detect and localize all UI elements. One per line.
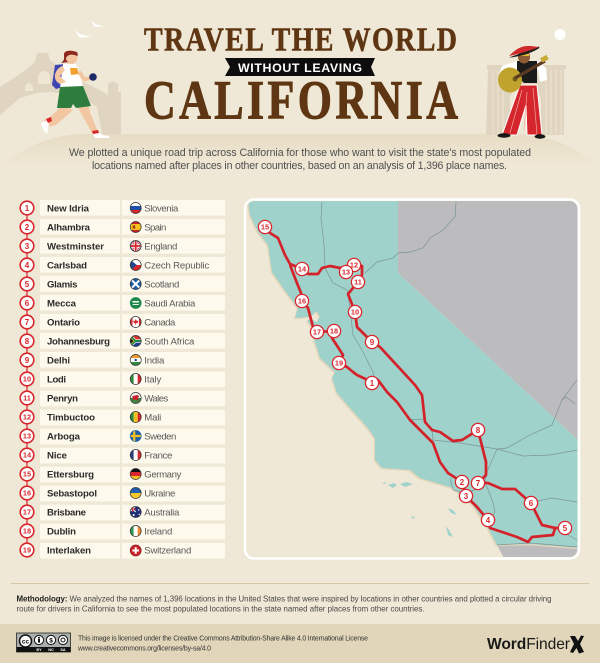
row 9 Delhi — [20, 352, 225, 368]
row 10 Lodi — [20, 372, 225, 387]
row 13 Arboga: 13 — [23, 432, 31, 441]
row 16 Sebastopol: Ukraine — [144, 488, 175, 499]
row 6 Mecca: Mecca — [47, 298, 77, 309]
title line 3: CALIFORNIA — [144, 70, 458, 131]
row 2 Alhambra — [20, 219, 225, 235]
route markers: 16 — [298, 297, 306, 306]
route markers: 19 — [335, 359, 343, 368]
row 10 Lodi: Lodi — [47, 374, 66, 385]
row 3 Westminster: Westminster — [47, 241, 104, 252]
route markers: 10 — [351, 308, 359, 317]
row 19 Interlaken: 19 — [23, 546, 31, 555]
license text: www.creativecommons.org/licenses/by-sa/4.0 — [77, 646, 211, 652]
row 8 Johannesburg: Johannesburg — [47, 336, 110, 347]
row 1 New Idria: New Idria — [47, 203, 90, 214]
row 8 Johannesburg: 8 — [25, 337, 30, 346]
icon: creative commons badge: NC — [48, 648, 54, 652]
panel: route map — [245, 200, 580, 560]
row 14 Nice: Nice — [47, 450, 67, 461]
row 11 Penryn: Wales — [144, 393, 169, 404]
row 4 Carlsbad — [20, 257, 225, 273]
row 6 Mecca: Saudi Arabia — [144, 298, 196, 309]
row 5 Glamis: 5 — [25, 280, 30, 289]
row 9 Delhi: Delhi — [47, 355, 70, 366]
methodology note: Methodology: We analyzed the names of 1,396 locations in the United States that were inspired by locations in other countries and plotted a circular driving — [16, 594, 552, 604]
route markers: 3 — [464, 492, 469, 501]
row 17 Brisbane — [20, 505, 225, 520]
row 3 Westminster: 3 — [25, 242, 30, 251]
route markers: 1 — [370, 379, 375, 388]
row 2 Alhambra: Spain — [144, 222, 166, 233]
route markers: 6 — [529, 499, 534, 508]
row 13 Arboga — [20, 429, 225, 444]
row 9 Delhi: India — [144, 355, 165, 366]
route markers: 13 — [342, 268, 350, 277]
route markers: 2 — [460, 478, 465, 487]
illustration: sun — [554, 29, 566, 40]
row 17 Brisbane: Brisbane — [47, 507, 86, 518]
row 12 Timbuctoo: 12 — [23, 413, 31, 422]
row 7 Ontario — [20, 314, 225, 330]
footer band — [0, 624, 600, 663]
connector line for numbered list — [26, 208, 28, 550]
title ribbon: WITHOUT LEAVING — [238, 61, 362, 75]
row 10 Lodi: 10 — [23, 375, 31, 384]
row 16 Sebastopol: 16 — [23, 489, 31, 498]
route markers: 14 — [298, 265, 307, 274]
row 12 Timbuctoo — [20, 410, 225, 425]
row 6 Mecca — [20, 295, 225, 311]
row 11 Penryn: Penryn — [47, 393, 78, 404]
row 7 Ontario: Canada — [144, 317, 176, 328]
title ribbon — [225, 58, 375, 76]
row 19 Interlaken: Switzerland — [144, 546, 191, 556]
row 11 Penryn: 11 — [23, 394, 31, 403]
row 12 Timbuctoo: Mali — [144, 412, 161, 423]
row 18 Dublin: Dublin — [47, 526, 76, 537]
row 14 Nice: France — [144, 450, 172, 461]
logo: WordFinder X: WordFinder — [487, 636, 570, 653]
route markers: 9 — [370, 338, 375, 347]
route markers: 12 — [350, 261, 358, 270]
row 4 Carlsbad: Czech Republic — [144, 260, 210, 271]
row 5 Glamis — [20, 276, 225, 292]
row 1 New Idria — [20, 200, 225, 216]
illustration: stone arch gate — [0, 53, 121, 134]
row 1 New Idria: 1 — [25, 204, 30, 213]
row 17 Brisbane: Australia — [144, 507, 180, 518]
icon: creative commons badge — [16, 633, 70, 652]
route markers: 18 — [330, 327, 338, 336]
intro paragraph — [69, 147, 531, 172]
route markers: 8 — [476, 426, 481, 435]
list: route stops — [20, 200, 225, 559]
route markers: 11 — [354, 278, 362, 287]
row 4 Carlsbad: Carlsbad — [47, 260, 87, 271]
icon: creative commons badge: BY — [36, 648, 42, 652]
road trip route — [265, 227, 565, 542]
route markers: 15 — [261, 223, 269, 232]
row 14 Nice — [20, 448, 225, 463]
row 15 Ettersburg — [20, 467, 225, 482]
row 2 Alhambra: 2 — [25, 223, 30, 232]
row 6 Mecca: 6 — [25, 299, 30, 308]
icon: creative commons badge: SA — [60, 648, 66, 652]
route markers: 5 — [563, 524, 568, 533]
icon: creative commons badge: cc — [22, 638, 29, 645]
route markers: 7 — [476, 479, 481, 488]
illustration: triumphal arch — [486, 65, 566, 135]
row 7 Ontario: 7 — [25, 318, 30, 327]
row 7 Ontario: Ontario — [47, 317, 80, 328]
row 8 Johannesburg — [20, 333, 225, 349]
hill behind header — [0, 134, 598, 166]
row 13 Arboga: Arboga — [47, 431, 81, 442]
row 13 Arboga: Sweden — [144, 431, 176, 442]
intro paragraph: locations named after places in other countries, based on an analysis of 1,396 place names. — [92, 160, 507, 172]
methodology note — [16, 594, 552, 614]
row 8 Johannesburg: South Africa — [144, 336, 195, 347]
license text: This image is licensed under the Creative Commons Attribution-Share Alike 4.0 International License — [78, 636, 368, 642]
row 5 Glamis: Scotland — [144, 279, 179, 290]
route markers: 17 — [313, 328, 321, 337]
license text — [77, 636, 368, 652]
methodology note: route for drivers in California to see the most populated locations in the state named after places from other countries. — [16, 604, 424, 614]
row 11 Penryn — [20, 391, 225, 406]
illustration: guitarist — [498, 46, 549, 139]
illustration: birds — [74, 20, 104, 38]
row 15 Ettersburg: Ettersburg — [47, 469, 94, 480]
row 4 Carlsbad: 4 — [25, 261, 30, 270]
row 19 Interlaken: Interlaken — [47, 546, 91, 556]
title line 1: TRAVEL THE WORLD — [144, 20, 457, 58]
row 14 Nice: 14 — [23, 451, 32, 460]
row 3 Westminster — [20, 238, 225, 254]
row 9 Delhi: 9 — [25, 356, 30, 365]
row 19 Interlaken — [20, 543, 225, 559]
row 15 Ettersburg: 15 — [23, 470, 31, 479]
row 18 Dublin — [20, 524, 225, 539]
intro paragraph: We plotted a unique road trip across California for those who want to visit the state's most populated — [69, 147, 531, 159]
row 12 Timbuctoo: Timbuctoo — [47, 412, 95, 423]
route markers: 4 — [486, 516, 491, 525]
row 1 New Idria: Slovenia — [144, 203, 179, 214]
illustration: traveller with camera — [41, 50, 109, 138]
row 3 Westminster: England — [144, 241, 177, 252]
row 5 Glamis: Glamis — [47, 279, 78, 290]
row 10 Lodi: Italy — [144, 374, 162, 385]
map land and state areas — [247, 200, 580, 560]
row 16 Sebastopol — [20, 486, 225, 501]
row 2 Alhambra: Alhambra — [47, 222, 91, 233]
row 16 Sebastopol: Sebastopol — [47, 488, 97, 499]
row 17 Brisbane: 17 — [23, 508, 31, 517]
route markers — [258, 220, 572, 535]
row 15 Ettersburg: Germany — [144, 469, 182, 480]
row 18 Dublin: 18 — [23, 527, 31, 536]
icon: creative commons badge: $ — [49, 638, 53, 644]
row 18 Dublin: Ireland — [144, 526, 172, 537]
